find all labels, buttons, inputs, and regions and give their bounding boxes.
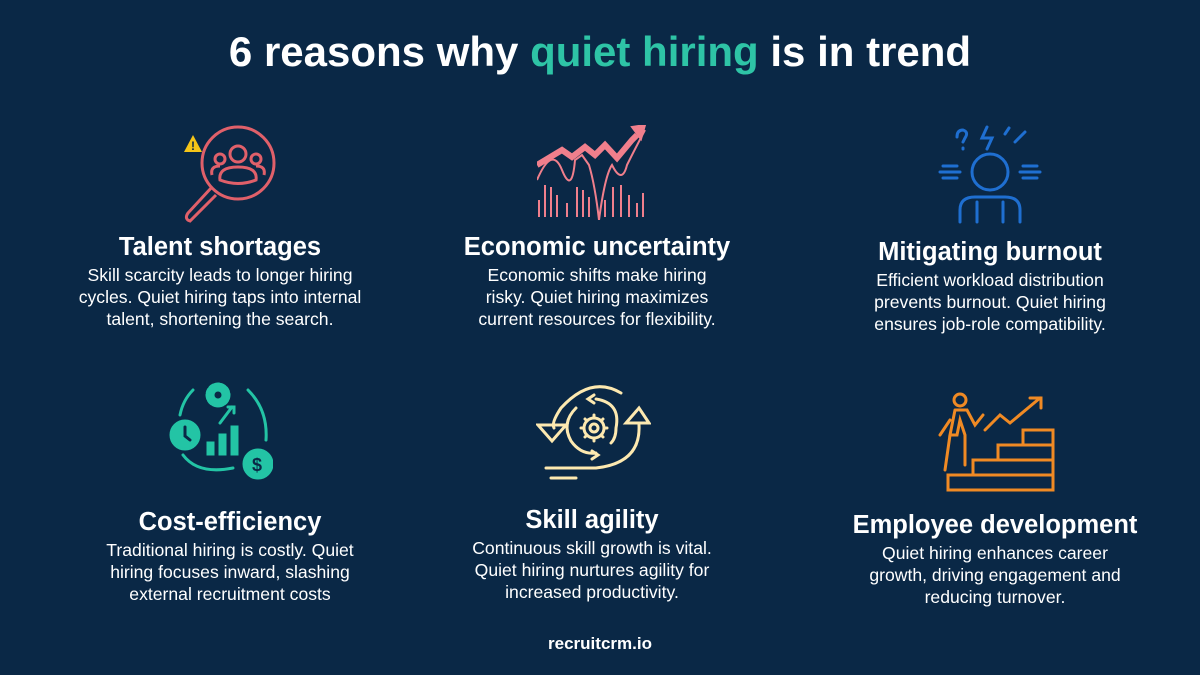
heading block: talent shortages: Skill scarcity leads to longer hiring	[88, 265, 352, 285]
heading block: mitigating burnout: Mitigating burnout	[878, 238, 1102, 266]
heading block: talent shortages: cycles. Quiet hiring taps into internal	[79, 287, 361, 307]
heading block: cost efficiency	[106, 508, 354, 604]
heading block: skill agility: Continuous skill growth is vital.	[472, 538, 712, 558]
heading block: skill agility	[472, 506, 712, 602]
icon: skill agility	[536, 385, 651, 480]
icon: economic chart	[537, 125, 646, 220]
icon: magnifier with people	[184, 126, 276, 223]
heading block: cost efficiency: external recruitment costs	[129, 584, 331, 604]
icon: employee development stairs	[938, 392, 1054, 492]
heading block: talent shortages: talent, shortening the search.	[107, 309, 333, 329]
heading block: employee development	[853, 511, 1138, 607]
heading block: cost efficiency: Traditional hiring is costly. Quiet	[106, 540, 354, 560]
heading block: cost efficiency: hiring focuses inward, slashing	[110, 562, 350, 582]
heading block: mitigating burnout: Efficient workload distribution	[876, 270, 1104, 290]
heading block: employee development: Quiet hiring enhances career	[882, 543, 1108, 563]
icon: cost efficiency	[170, 382, 273, 480]
heading block: skill agility: increased productivity.	[505, 582, 679, 602]
heading block: skill agility: Quiet hiring nurtures agility for	[475, 560, 709, 580]
heading block: mitigating burnout: prevents burnout. Quiet hiring	[874, 292, 1106, 312]
title: 6 reasons why quiet hiring is in trend	[229, 28, 971, 75]
heading block: employee development: growth, driving engagement and	[869, 565, 1121, 585]
icon: burnout head	[938, 126, 1042, 224]
heading block: employee development: reducing turnover.	[925, 587, 1065, 607]
icon: magnifier with people: !	[191, 139, 195, 153]
heading block: cost efficiency: Cost-efficiency	[139, 508, 321, 536]
heading block: mitigating burnout: ensures job-role compatibility.	[874, 314, 1106, 334]
heading block: economic uncertainty	[464, 233, 730, 329]
footer brand: recruitcrm.io	[548, 634, 652, 653]
heading block: mitigating burnout	[874, 238, 1106, 334]
heading block: economic uncertainty: Economic shifts make hiring	[487, 265, 707, 285]
icon: cost efficiency: $	[252, 455, 262, 475]
heading block: talent shortages	[79, 233, 361, 329]
heading block: economic uncertainty: risky. Quiet hiring maximizes	[486, 287, 708, 307]
heading block: talent shortages: Talent shortages	[119, 233, 321, 261]
heading block: economic uncertainty: current resources for flexibility.	[478, 309, 716, 329]
heading block: economic uncertainty: Economic uncertainty	[464, 233, 730, 261]
heading block: employee development: Employee development	[853, 511, 1137, 539]
heading block: skill agility: Skill agility	[525, 506, 659, 534]
